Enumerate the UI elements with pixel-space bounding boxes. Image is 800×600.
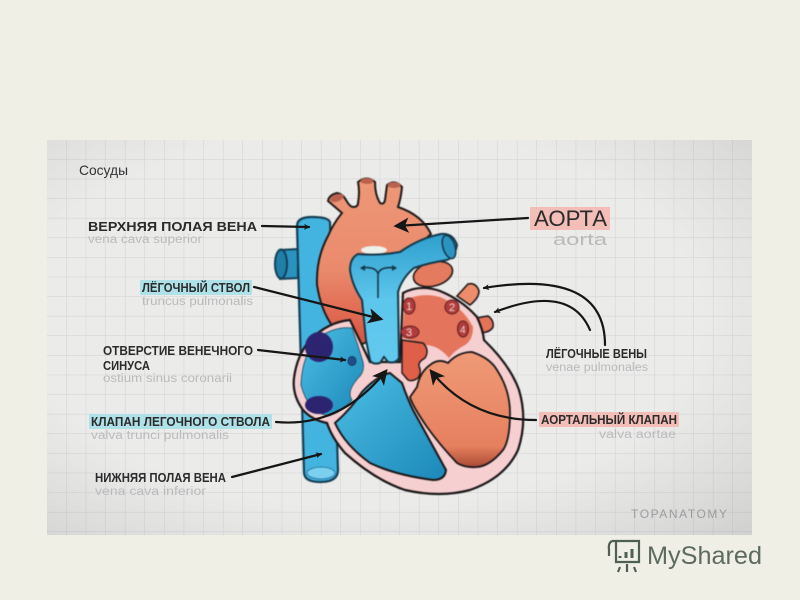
label: aortic valve: valva aortae — [599, 429, 676, 441]
left atrium with pulmonary vein openings — [401, 295, 473, 358]
label: pulmonary veins: venae pulmonales — [546, 362, 648, 374]
brand: TopAnatomy: TOPANATOMY — [631, 507, 727, 521]
label: inferior vena cava: НИЖНЯЯ ПОЛАЯ ВЕНА — [95, 470, 227, 485]
label: pulmonary trunk: truncus pulmonalis — [142, 296, 253, 308]
left ventricle — [410, 352, 510, 467]
left atrium with pulmonary vein openings: 1 — [406, 301, 412, 313]
label: aorta — [530, 206, 610, 249]
panel: grid paper — [47, 140, 752, 535]
label: aortic valve — [539, 412, 679, 441]
label: pulmonary veins — [546, 346, 648, 374]
label: pulmonary valve — [89, 414, 272, 442]
label: pulmonary trunk: ЛЁГОЧНЫЙ СТВОЛ — [142, 280, 250, 295]
label: inferior vena cava: vena cava inferior — [95, 486, 206, 498]
right pulmonary artery oval — [411, 257, 455, 291]
coronary sinus opening — [348, 356, 356, 366]
label: superior vena cava: vena cava superior — [88, 234, 202, 246]
label: superior vena cava — [88, 219, 258, 246]
icon: presentation board — [609, 541, 639, 572]
label: coronary sinus ostium: ostium sinus coronarii — [103, 373, 232, 385]
left atrium with pulmonary vein openings: 3 — [406, 327, 412, 339]
label: inferior vena cava — [95, 470, 227, 498]
aortic root and valve — [402, 340, 427, 381]
dark openings of vena cava — [305, 332, 333, 362]
heart illustration — [275, 178, 523, 494]
logo: MyShared — [609, 541, 762, 572]
heart wall — [294, 288, 523, 494]
label: pulmonary veins: ЛЁГОЧНЫЕ ВЕНЫ — [546, 346, 647, 361]
aorta — [317, 178, 431, 345]
left atrium with pulmonary vein openings: 2 — [449, 302, 455, 314]
arrows — [232, 218, 605, 477]
label: aorta: aorta — [553, 230, 608, 249]
label: aorta: АОРТА — [534, 206, 607, 231]
right ventricle — [335, 373, 446, 480]
label: pulmonary valve: valva trunci pulmonalis — [91, 430, 229, 442]
label: superior vena cava: ВЕРХНЯЯ ПОЛАЯ ВЕНА — [88, 219, 258, 234]
label: aortic valve: АОРТАЛЬНЫЙ КЛАПАН — [541, 412, 677, 427]
label: pulmonary trunk — [140, 280, 253, 308]
label: coronary sinus ostium: СИНУСА — [103, 358, 151, 373]
pulmonary trunk — [350, 234, 458, 364]
label: pulmonary valve: КЛАПАН ЛЕГОЧНОГО СТВОЛА — [91, 414, 271, 429]
label: coronary sinus ostium — [103, 343, 253, 385]
heading: vessels: Сосуды — [79, 162, 128, 178]
label: coronary sinus ostium: ОТВЕРСТИЕ ВЕНЕЧНОГО — [103, 343, 253, 358]
left atrium with pulmonary vein openings: 4 — [460, 325, 466, 336]
right atrium — [301, 328, 363, 416]
logo: MyShared: MyShared — [647, 542, 762, 570]
superior and inferior vena cava — [275, 217, 338, 482]
pulmonary veins — [457, 284, 493, 333]
